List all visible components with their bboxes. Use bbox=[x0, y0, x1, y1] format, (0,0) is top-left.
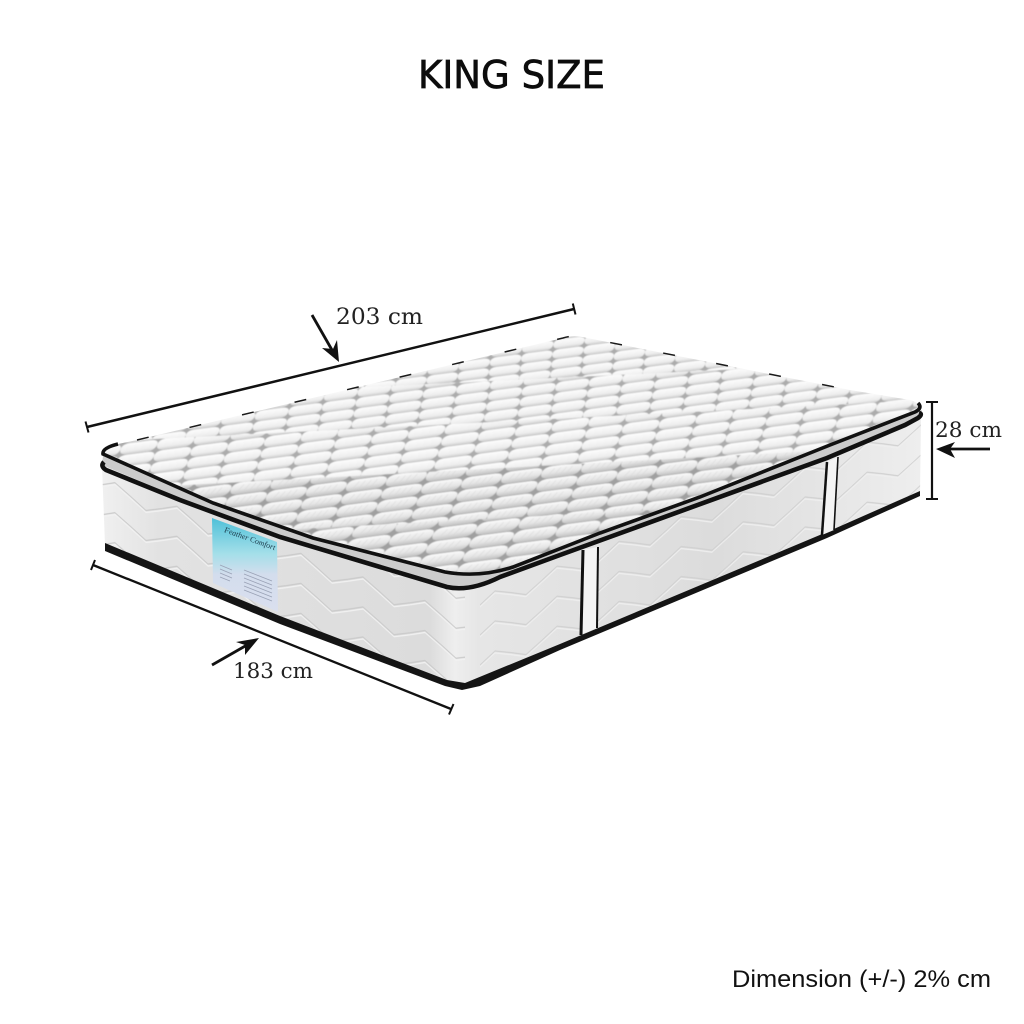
bottom piping bbox=[105, 491, 920, 690]
quilted top surface bbox=[105, 336, 918, 572]
arrow: 28 cm bbox=[936, 442, 990, 458]
footnote: Dimension (+/-) 2% cm bbox=[732, 966, 991, 993]
arrow: 203 cm bbox=[312, 315, 339, 362]
dimension line: 183 cm bbox=[91, 560, 454, 714]
arrow: 183 cm bbox=[212, 638, 259, 665]
title: KING SIZE bbox=[418, 53, 605, 97]
label: 28 cm: 28 cm bbox=[935, 418, 1002, 443]
dimension line: 28 cm bbox=[926, 402, 938, 499]
dimension line: 203 cm bbox=[86, 304, 576, 432]
label: 183 cm: 183 cm bbox=[233, 659, 313, 684]
second piping bbox=[102, 413, 921, 588]
handle: front bbox=[580, 547, 598, 635]
product label: Feather Comfort bbox=[223, 525, 277, 553]
label: 203 cm: 203 cm bbox=[336, 304, 423, 330]
top piping bbox=[103, 403, 920, 574]
mattress bbox=[95, 330, 930, 700]
mattress side panel bbox=[102, 418, 921, 683]
seam band between piping bbox=[102, 410, 922, 588]
handle: back bbox=[822, 457, 838, 535]
product label bbox=[212, 518, 278, 612]
back edge piping bbox=[137, 336, 850, 440]
